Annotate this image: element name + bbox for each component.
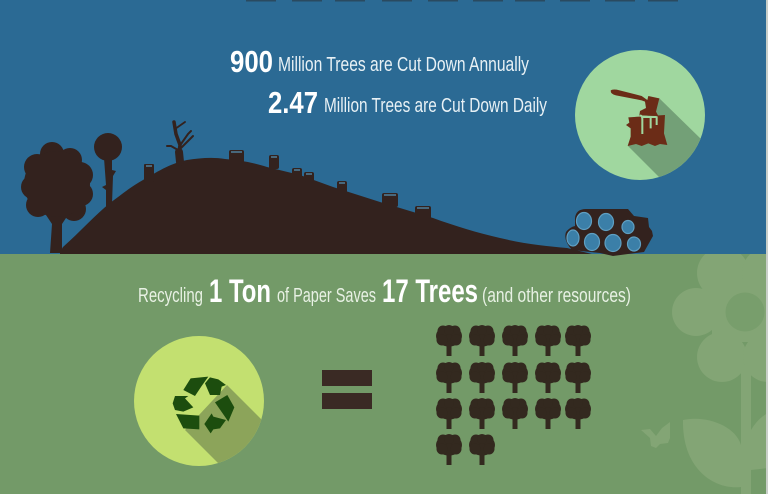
equals sign: [322, 370, 372, 409]
daily statistic text: [268, 85, 547, 120]
recycling headline: 17 Trees: [382, 273, 478, 309]
small tree silhouette: [94, 133, 122, 208]
recycling headline: Recycling: [138, 285, 203, 307]
top cropped title remnants: [246, 0, 678, 2]
stump marks: [144, 150, 431, 219]
17 trees pictogram: [436, 325, 591, 465]
annual statistic text: Million Trees are Cut Down Annually: [278, 54, 529, 76]
stacked logs: [565, 209, 653, 256]
recycling headline: [138, 273, 631, 309]
daily statistic text: Million Trees are Cut Down Daily: [324, 95, 547, 117]
daily statistic text: 2.47: [268, 85, 318, 120]
icon: axe in stump circle: [575, 50, 705, 185]
annual statistic text: [230, 44, 529, 79]
icon: recycling circle: [134, 336, 266, 470]
large tree silhouette: [21, 142, 93, 253]
green ground panel: [0, 254, 768, 494]
hill silhouette with stumps: [60, 150, 592, 254]
decorative flower: [672, 247, 768, 494]
recycling headline: 1 Ton: [209, 273, 271, 309]
recycling headline: (and other resources): [482, 285, 631, 307]
decorative butterfly: [641, 422, 670, 448]
dead tree silhouette: [167, 122, 193, 162]
recycling headline: of Paper Saves: [277, 285, 376, 307]
blue background panel: [0, 0, 768, 254]
annual statistic text: 900: [230, 44, 273, 79]
